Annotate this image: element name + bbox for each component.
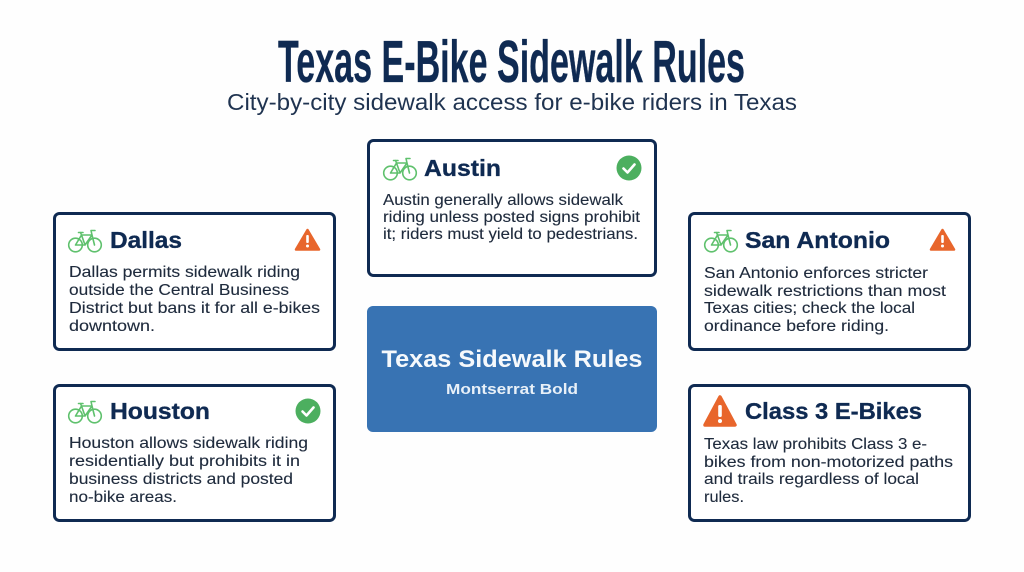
icon: San Antonio warning (931, 230, 954, 250)
heading: Houston: Houston (110, 398, 210, 424)
panel: Austin (368, 140, 656, 276)
icon: Houston check (296, 398, 320, 424)
heading: Austin: Austin (424, 155, 501, 181)
icon: Dallas bicycle (69, 230, 101, 252)
icon: Austin check (616, 156, 642, 180)
text: Austin description: it; riders must yield to pedestrians. (383, 226, 638, 243)
icon: Dallas warning (296, 230, 319, 250)
banner subheading: Montserrat Bold (446, 381, 578, 398)
text: San Antonio description: San Antonio enforces stricter (704, 265, 929, 282)
text: San Antonio description: ordinance before riding. (704, 318, 889, 335)
panel: Class 3 E-Bikes (690, 386, 970, 520)
text: Class 3 description: rules. (704, 489, 744, 506)
subtitle: City-by-city sidewalk access for e-bike riders in Texas (227, 89, 797, 115)
icon: Class 3 warning (705, 397, 735, 425)
text: Class 3 description: bikes from non-motorized paths (704, 454, 953, 471)
icon: Houston bicycle (69, 402, 101, 423)
panel: Dallas (54, 214, 334, 350)
icon: San Antonio bicycle (705, 230, 737, 252)
banner heading: Texas Sidewalk Rules (382, 346, 642, 373)
heading: Dallas: Dallas (110, 227, 182, 253)
icon: Austin bicycle (384, 158, 416, 180)
text: Class 3 description: and trails regardless of local (704, 471, 919, 488)
text: San Antonio description (704, 265, 947, 335)
panel: Houston (54, 386, 334, 520)
text: San Antonio description: Texas cities; check the local (704, 300, 915, 317)
text: Houston description: business districts and posted (69, 471, 293, 488)
text: Dallas description: Dallas permits sidewalk riding (69, 264, 300, 281)
text: San Antonio description: sidewalk restrictions than most (704, 283, 947, 300)
text: Dallas description: outside the Central Business (69, 282, 289, 299)
panel: San Antonio (690, 214, 970, 350)
text: Houston description (69, 435, 308, 506)
panel: center banner (367, 306, 657, 432)
text: Dallas description: District but bans it for all e-bikes (69, 300, 320, 317)
text: Class 3 description (704, 436, 953, 506)
text: Austin description: Austin generally allows sidewalk (383, 192, 624, 209)
text: Austin description: riding unless posted signs prohibit (383, 209, 641, 226)
text: Houston description: Houston allows sidewalk riding (69, 435, 308, 452)
text: Class 3 description: Texas law prohibits Class 3 e- (704, 436, 927, 453)
text: Dallas description: downtown. (69, 318, 155, 335)
text: Dallas description (69, 264, 320, 335)
heading: San Antonio: San Antonio (745, 227, 890, 253)
text: Houston description: no-bike areas. (69, 489, 177, 506)
text: Austin description (383, 192, 641, 243)
text: Houston description: residentially but prohibits it in (69, 453, 300, 470)
heading: Class 3 E-Bikes: Class 3 E-Bikes (745, 398, 922, 424)
